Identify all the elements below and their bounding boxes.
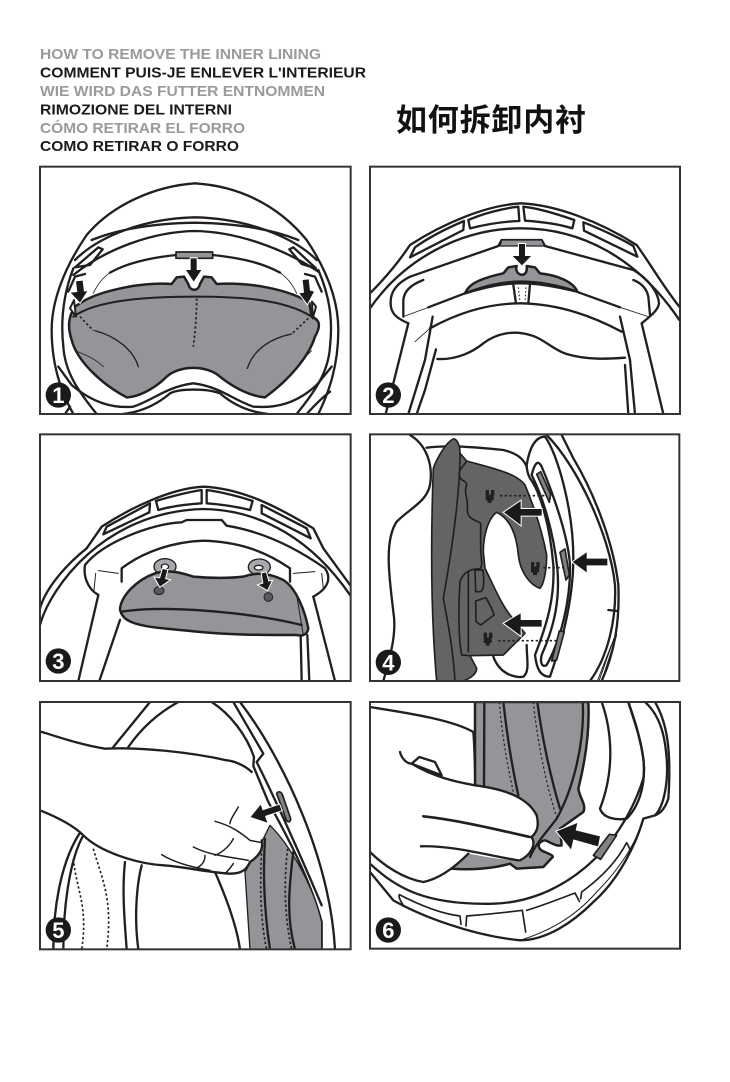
step badge 2: 2: [382, 383, 394, 408]
hand: [80, 766, 261, 872]
step badge 2: [376, 382, 401, 408]
helmet shell: [527, 437, 573, 677]
title: multilingual headings: CÓMO RETIRAR EL FORRO: [40, 119, 245, 137]
title: multilingual headings: RIMOZIONE DEL INTERNI: [40, 102, 232, 118]
panel: step 4: [370, 434, 679, 681]
panel: step 5: [40, 702, 351, 949]
clip icons: [484, 490, 539, 645]
grey lining: [452, 702, 589, 869]
helmet shell: [370, 702, 644, 904]
grey inner lining: [69, 277, 319, 397]
straps: [386, 323, 408, 414]
title: multilingual headings: WIE WIRD DAS FUTTER ENTNOMMEN: [40, 83, 325, 100]
step badge 5: 5: [52, 918, 64, 943]
hand: [451, 760, 537, 868]
arrow: [251, 805, 282, 823]
arrows: [186, 258, 201, 282]
side clips: [537, 472, 551, 502]
step badge 4: [376, 650, 401, 675]
arrows: [155, 569, 169, 587]
step badge 3: 3: [52, 649, 64, 674]
title: multilingual headings: COMO RETIRAR O FORRO: [40, 138, 239, 155]
vents: [399, 895, 461, 924]
straps: [78, 595, 98, 681]
step badge 6: 6: [382, 918, 394, 943]
panel: step 1: [40, 167, 351, 415]
step badge 1: 1: [52, 383, 64, 408]
panel: step 3: [40, 434, 351, 681]
title: multilingual headings: COMMENT PUIS-JE ENLEVER L'INTERIEUR: [40, 64, 366, 82]
grey slot: [500, 240, 544, 246]
title: multilingual headings: [40, 46, 366, 155]
step badge 5: [46, 917, 71, 943]
step badge 6: [376, 917, 401, 943]
folded grey lining: [120, 572, 308, 636]
grommets: [154, 559, 176, 575]
grey lining: [245, 825, 322, 949]
center retaining slot: [176, 252, 213, 258]
side clip: [277, 792, 291, 822]
arrow: [557, 823, 600, 849]
arrows: [504, 501, 542, 525]
title: multilingual headings: HOW TO REMOVE THE INNER LINING: [40, 46, 321, 63]
grey lining tab: [465, 266, 577, 293]
arrow: [513, 244, 531, 265]
step badge 4: 4: [382, 650, 395, 675]
title: Chinese heading: 如何拆卸内衬: [396, 103, 586, 138]
dark lining: [432, 439, 547, 681]
panel: step 6: [370, 702, 680, 949]
step badge 1: [46, 382, 71, 408]
step badge 3: [46, 648, 71, 674]
panel: step 2: [370, 167, 680, 414]
dashed alignment lines: [498, 496, 563, 641]
side clip: [593, 834, 617, 859]
